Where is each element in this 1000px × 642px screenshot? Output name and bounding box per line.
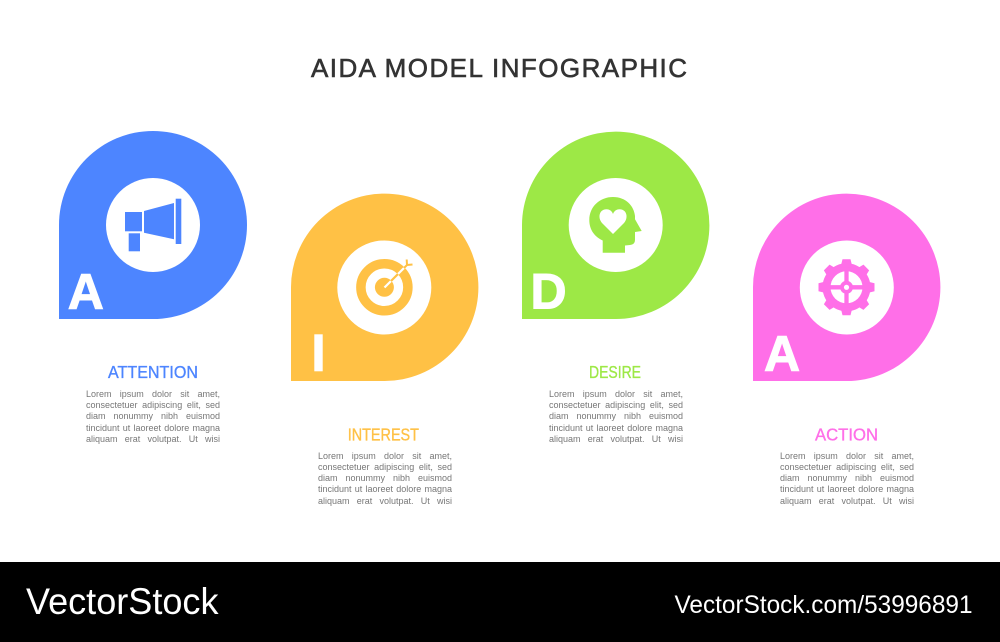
body text: action: tincidunt ut laoreet dolore magna [780,484,914,494]
heading: desire: DESIRE [589,362,641,382]
body text: attention [86,389,220,446]
body text: action: aliquam erat volutpat. Ut wisi [780,496,914,506]
icon: head with heart [589,197,642,253]
body text: attention: consectetuer adipiscing elit, sed [86,400,220,410]
teardrop: attention [59,131,247,319]
heading: action: ACTION [815,425,878,445]
body text: interest: tincidunt ut laoreet dolore magna [318,484,452,494]
body text: attention: aliquam erat volutpat. Ut wisi [86,434,220,444]
body text: action: Lorem ipsum dolor sit amet, [780,450,914,460]
footer logo text: VectorStock [26,580,219,622]
panel: desire [522,132,709,446]
body text: interest [318,450,452,508]
body text: attention: Lorem ipsum dolor sit amet, [86,389,220,399]
body text: desire: aliquam erat volutpat. Ut wisi [549,434,683,444]
body text: action [780,450,914,508]
footer band [0,562,1000,642]
panel: action [753,194,940,508]
body text: interest: Lorem ipsum dolor sit amet, [318,450,452,460]
heading: attention: ATTENTION [108,362,198,382]
footer image id: VectorStock.com/53996891 [674,591,972,619]
body text: attention: tincidunt ut laoreet dolore magna [86,423,220,433]
letter D: D [530,264,567,320]
body text: desire: diam nonummy nibh euismod [549,411,683,421]
icon circle: interest [337,240,431,334]
heading: interest: INTEREST [348,425,419,445]
icon circle: attention [106,178,200,272]
body text: desire: tincidunt ut laoreet dolore magna [549,423,683,433]
icon: target with arrow [361,260,412,311]
teardrop: action [753,194,940,381]
letter I [314,334,323,371]
teardrop: desire [522,132,709,319]
body text: desire [549,389,683,446]
icon circle: desire [569,178,663,272]
teardrop: interest [291,194,478,381]
body text: interest: consectetuer adipiscing elit, sed [318,462,452,472]
icon: megaphone [125,199,181,251]
body text: action: diam nonummy nibh euismod [780,473,914,483]
body text: interest: diam nonummy nibh euismod [318,473,452,483]
body text: interest: aliquam erat volutpat. Ut wisi [318,496,452,506]
icon: gear [818,259,874,315]
letter A: A [764,326,800,382]
title: AIDA MODEL INFOGRAPHIC [311,53,687,83]
panel: interest [291,194,478,508]
body text: desire: consectetuer adipiscing elit, sed [549,400,683,410]
body text: action: consectetuer adipiscing elit, sed [780,462,914,472]
panel: attention [59,131,247,446]
body text: desire: Lorem ipsum dolor sit amet, [549,389,683,399]
icon circle: action [800,240,894,334]
body text: attention: diam nonummy nibh euismod [86,411,220,421]
letter A: A [68,264,104,320]
